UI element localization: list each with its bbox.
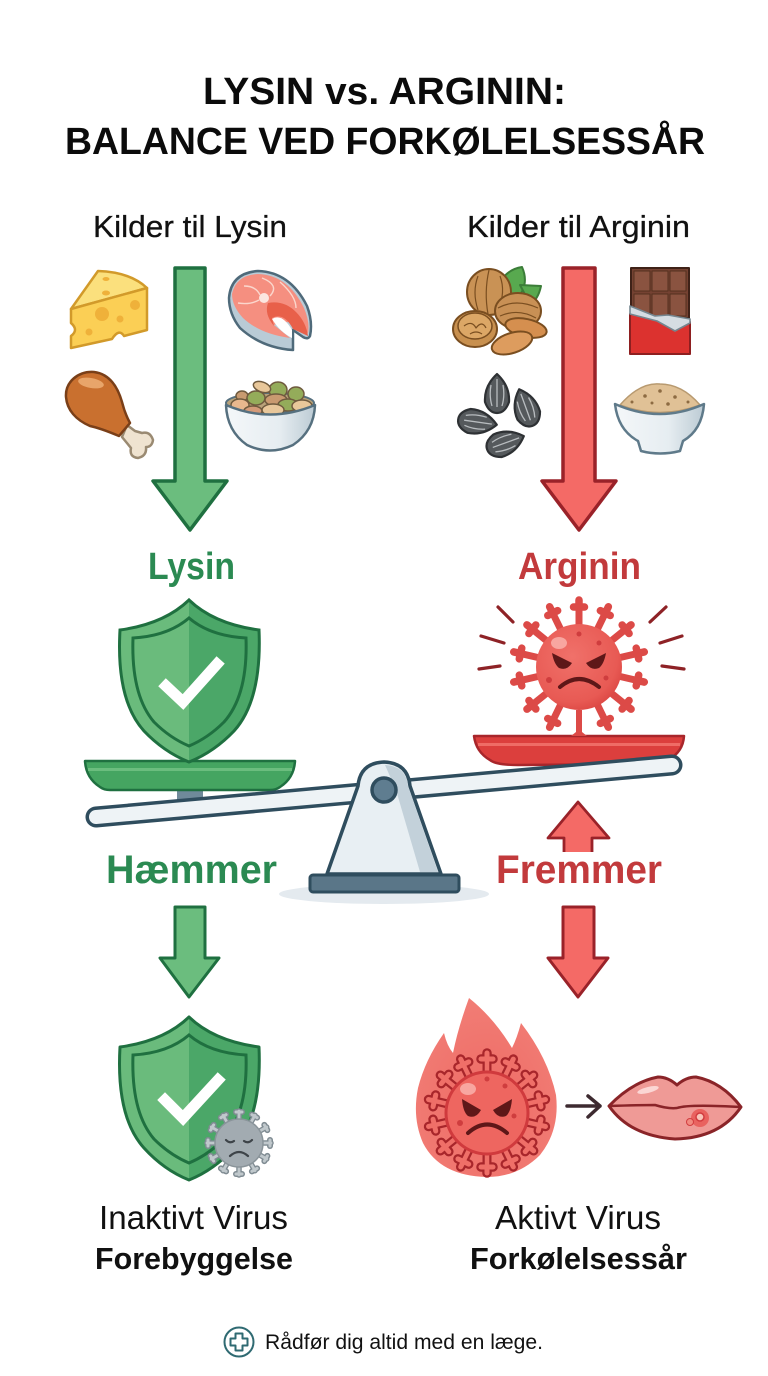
arrow: fremmer down <box>548 907 608 997</box>
right pan with angry virus <box>474 600 684 765</box>
fulcrum <box>327 762 441 874</box>
text: left outcome <box>95 1199 293 1276</box>
icon: bowl of grain <box>615 384 704 454</box>
icon: medical cross <box>224 1328 254 1356</box>
title: LYSIN vs. ARGININ: <box>203 71 566 113</box>
arrow: arginin sources <box>542 268 616 530</box>
label: Hæmmer: Hæmmer <box>106 848 277 892</box>
icon: nuts <box>453 267 548 359</box>
icon: chicken drumstick <box>66 372 153 458</box>
heading: Kilder til Arginin: Kilder til Arginin <box>467 209 690 244</box>
left pan with shield <box>85 600 295 801</box>
beam <box>96 765 672 817</box>
text: left outcome: Forebyggelse <box>95 1241 293 1276</box>
text: right outcome: Aktivt Virus <box>495 1199 661 1236</box>
icon: sunflower seeds <box>457 374 544 461</box>
shadow under fulcrum <box>279 884 489 904</box>
label: Fremmer: Fremmer <box>496 848 662 892</box>
footer note: Rådfør dig altid med en læge. <box>265 1331 543 1354</box>
arrow: lysin sources <box>153 268 227 530</box>
icon: chocolate bar <box>630 268 690 354</box>
scale <box>85 600 684 904</box>
text: left outcome: Inaktivt Virus <box>99 1199 288 1236</box>
text: right outcome: Forkølelsessår <box>470 1241 687 1276</box>
label: Arginin: Arginin <box>518 546 641 588</box>
text: right outcome <box>470 1199 687 1276</box>
arrow: virus to lips <box>567 1096 600 1117</box>
icon: shield with inactive virus <box>120 1017 271 1180</box>
icon: lips with cold sore <box>609 1077 741 1139</box>
arrow: hæmmer down <box>160 907 219 997</box>
title <box>65 71 705 163</box>
icon: bowl of beans <box>226 379 315 450</box>
icon: cheese <box>71 271 147 348</box>
icon: grey sad virus <box>207 1111 271 1175</box>
icon: salmon steak <box>229 271 311 350</box>
label: Lysin: Lysin <box>148 546 235 588</box>
icon: flaming virus <box>416 998 557 1177</box>
heading: Kilder til Lysin: Kilder til Lysin <box>93 209 287 244</box>
title: BALANCE VED FORKØLELSESSÅR <box>65 119 705 163</box>
arrow: up to arginin pan <box>548 802 609 856</box>
